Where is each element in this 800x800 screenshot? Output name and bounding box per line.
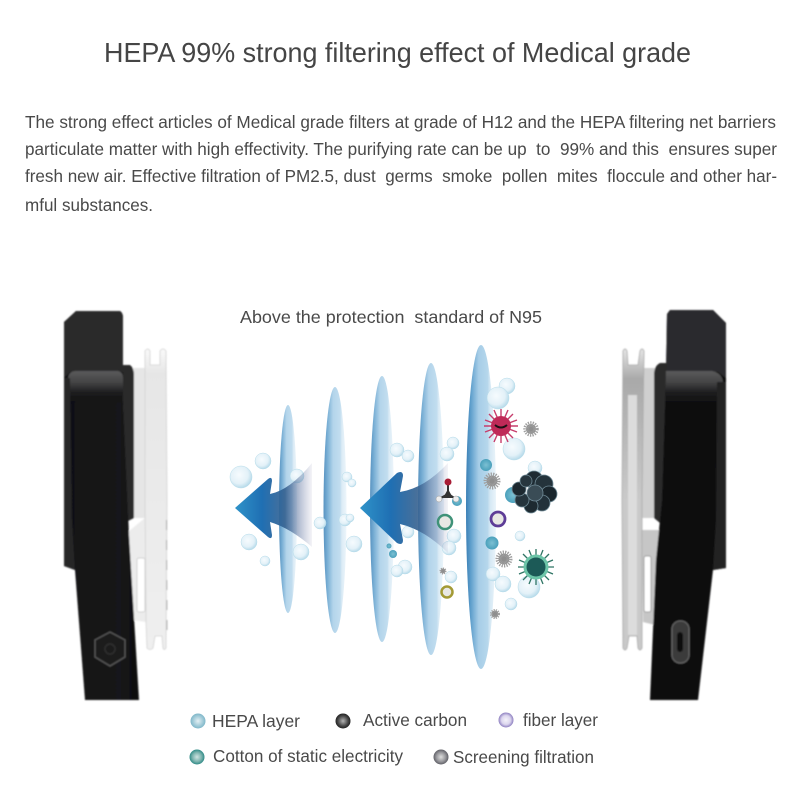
filter layers bbox=[279, 345, 496, 669]
description text block: particulate matter with high effectivity. The purifying rate can be up to 99% and this ensures super bbox=[25, 139, 777, 159]
filtration diagram bbox=[230, 345, 557, 669]
gray dust particles bbox=[440, 424, 536, 618]
left device top face bbox=[64, 311, 123, 378]
icon: molecule bbox=[436, 478, 459, 502]
icon: green germ bbox=[518, 549, 554, 585]
right device highlight band bbox=[665, 371, 723, 402]
legend item: Screening filtration: Screening filtration bbox=[453, 747, 594, 767]
arrow: right bbox=[360, 463, 448, 553]
legend item: Active carbon: Active carbon bbox=[363, 710, 467, 730]
left device side view bbox=[64, 311, 167, 700]
left dark collar bbox=[122, 365, 134, 522]
ring particles bbox=[438, 512, 505, 598]
bubbles bbox=[230, 378, 542, 610]
legend bbox=[190, 710, 598, 767]
legend item: fiber layer: fiber layer bbox=[523, 710, 598, 730]
legend item: HEPA layer: HEPA layer bbox=[212, 711, 300, 731]
description text block: mful substances. bbox=[25, 195, 153, 215]
right device body bbox=[650, 310, 726, 700]
icon: red germ bbox=[484, 409, 518, 443]
left device side strip bbox=[64, 378, 75, 570]
title: HEPA 99% strong filtering effect of Medical grade bbox=[104, 37, 691, 68]
arrow: left bbox=[235, 463, 312, 547]
description text block: The strong effect articles of Medical grade filters at grade of H12 and the HEPA filtering net barriers bbox=[25, 112, 776, 132]
left device body bbox=[64, 311, 139, 700]
subheading: N95: Above the protection standard of N95 bbox=[240, 307, 542, 327]
icon: USB port bbox=[672, 621, 689, 663]
description text block: fresh new air. Effective filtration of PM2.5, dust germs smoke pollen mites floccule and other har- bbox=[25, 166, 777, 186]
right device top face bbox=[666, 310, 726, 378]
right dark collar bbox=[654, 363, 668, 523]
right filter ring bbox=[622, 349, 659, 650]
description text block bbox=[25, 112, 777, 215]
teal particles bbox=[386, 459, 521, 558]
icon: power button bbox=[95, 632, 125, 666]
left filter ring bbox=[128, 349, 167, 650]
left device highlight band bbox=[68, 371, 123, 402]
right device side strip bbox=[713, 382, 726, 570]
right device side view bbox=[622, 310, 726, 700]
icon: carbon cluster bbox=[512, 471, 557, 513]
legend item: Cotton of static electricity: Cotton of static electricity bbox=[213, 746, 403, 766]
